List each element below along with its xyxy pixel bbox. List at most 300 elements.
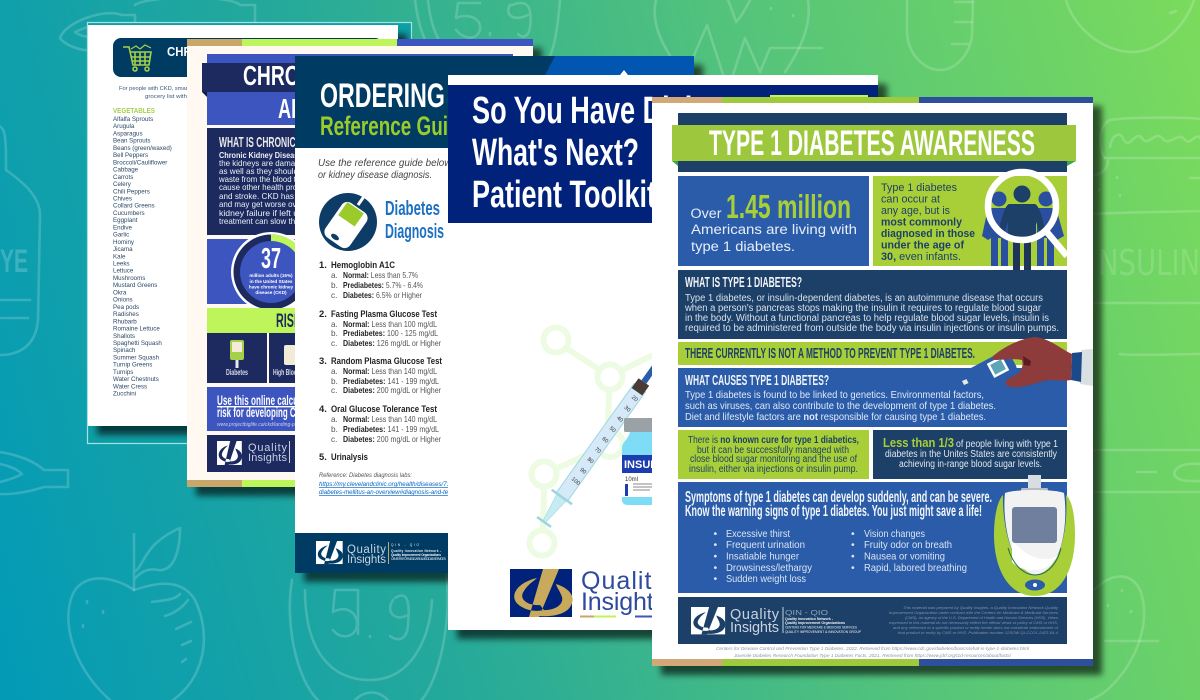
text: americans: Americans are living with xyxy=(691,222,857,237)
sleeve xyxy=(1080,349,1093,386)
vegetable list: Alfalfa Sprouts xyxy=(113,116,153,123)
diagnosis test list: Fasting Plasma Glucose Test xyxy=(331,308,437,319)
vegetable list: Hominy xyxy=(113,239,135,246)
symptom list right: • xyxy=(851,562,855,574)
fine print: Quality Innovation Network - xyxy=(391,549,441,553)
symptom list left: Insatiable hunger xyxy=(726,550,799,562)
diagnosis test list: Prediabetes: 5.7% - 6.4% xyxy=(343,281,423,290)
callout: online calculator: risk for developing CKD xyxy=(217,404,307,420)
caption: in the United States xyxy=(250,279,293,284)
vegetable list: Onions xyxy=(113,297,133,304)
vegetable list: Zucchini xyxy=(113,391,136,398)
symptom list left: Frequent urination xyxy=(726,539,805,551)
symptom list left: Sudden weight loss xyxy=(726,573,806,585)
intro text: For people with CKD, smart shopping xyxy=(119,86,214,92)
diagnosis test list: b. xyxy=(331,425,338,434)
text block xyxy=(881,182,975,263)
panel: no known cure: but it can be successfully managed with xyxy=(697,445,849,456)
text block: can occur at xyxy=(881,194,940,206)
citations: Centers for Disease Control and Prevention Type 1 Diabetes, 2022. Retrieved from https://www.cdc.gov/diabetes/basics/what-is-type-1-diabetes.html xyxy=(716,646,1030,652)
vegetable list: Lettuce xyxy=(113,268,134,275)
paragraph: and stroke. CKD has different stages of severity xyxy=(219,192,392,201)
diagnosis test list: Hemoglobin A1C xyxy=(331,259,395,270)
paragraph: kidney failure if left untreated. Early detection and xyxy=(219,209,409,218)
icon: centre person xyxy=(998,186,1046,272)
callout: online calculator xyxy=(207,387,513,431)
vegetable list: Turnips xyxy=(113,369,133,376)
title line 2: ARE YOU AT RISK? xyxy=(278,93,448,124)
QIN text: QIN - QIO xyxy=(785,610,829,617)
paragraph: when a person's pancreas stops making the insulin it requires to regulate blood sugar xyxy=(684,303,1042,314)
title line 1: So You Have Diabetes, xyxy=(472,90,763,132)
paragraph: and may get worse over time and can lead to xyxy=(219,200,377,209)
text: americans xyxy=(691,222,857,254)
diagnosis test list: a. xyxy=(331,320,338,329)
cuff xyxy=(1071,352,1082,382)
vegetable list: Bell Peppers xyxy=(113,152,148,159)
top colour band xyxy=(187,39,533,46)
diagnosis test list: Normal: Less than 5.7% xyxy=(343,271,418,280)
vegetable list: Radishes xyxy=(113,311,139,318)
vegetable list: Chives xyxy=(113,196,132,202)
disclaimer: This material was prepared by Quality Insights, a Quality Innovation Network-Quality xyxy=(903,606,1058,610)
heading: risk factors xyxy=(207,308,513,333)
title banner xyxy=(672,113,1076,172)
vegetable list: Cabbage xyxy=(113,167,139,174)
header band xyxy=(448,85,878,223)
text block: most commonly xyxy=(881,216,963,228)
disclaimer xyxy=(889,606,1059,635)
diagnosis test list: b. xyxy=(331,281,338,290)
heading xyxy=(685,489,992,520)
heading: vegetables: VEGETABLES xyxy=(113,106,155,115)
vegetable list: Eggplant xyxy=(113,217,138,224)
vegetable list: Mushrooms xyxy=(113,275,145,282)
logo divider xyxy=(289,441,290,463)
vegetable list: Turnip Greens xyxy=(113,362,152,369)
vegetable list: Garlic xyxy=(113,232,129,239)
icon: magnifier handle xyxy=(1046,231,1067,256)
reference links xyxy=(319,472,460,496)
header title: CHRONIC KIDNEY xyxy=(167,44,267,59)
paragraph xyxy=(218,151,417,226)
vegetable list: Asparagus xyxy=(113,130,143,137)
QIN text: CENTERS FOR MEDICARE & MEDICAID SERVICES xyxy=(785,626,858,630)
paragraph: as well as they should. This can cause excess fluid and xyxy=(219,167,417,176)
paragraph: Diet and lifestyle factors are not responsible for causing type 1 diabetes. xyxy=(685,411,986,423)
syringe scale: 20 xyxy=(630,395,639,403)
vegetable list: Shallots xyxy=(113,333,135,340)
syringe scale xyxy=(569,393,640,487)
diagnosis test list xyxy=(319,259,442,462)
fine print: Quality Improvement Organizations xyxy=(391,553,441,557)
document frame xyxy=(88,22,412,444)
subtitle: Reference Guide xyxy=(320,111,470,141)
diagnosis test list: c. xyxy=(331,435,337,444)
syringe scale: 70 xyxy=(593,446,602,455)
paragraph xyxy=(685,389,996,423)
illustration: hand holding glucose meter xyxy=(962,337,1093,395)
text block: of people living with type 1 xyxy=(956,439,1058,450)
vegetable list: Cucumbers xyxy=(113,210,145,217)
panel: no known cure: There is no known cure for type 1 diabetics, xyxy=(688,435,859,446)
document collage xyxy=(88,22,1093,666)
logo wordmark: Insights xyxy=(730,620,779,636)
diagnosis test list: Diabetes: 126 mg/dL or Higher xyxy=(343,339,441,348)
paragraph: Type 1 diabetes, or insulin-dependent diabetes, is an autoimmune disease that occurs xyxy=(685,293,1043,304)
diagnosis test list: Prediabetes: 141 - 199 mg/dL xyxy=(343,425,439,434)
heading: diabetes diagnosis xyxy=(385,198,444,243)
vegetable list: Collard Greens xyxy=(113,203,155,210)
vegetable list: Pea pods xyxy=(113,304,139,311)
logo divider xyxy=(388,542,389,564)
illustration: glucose meter xyxy=(994,475,1075,596)
intro text xyxy=(318,157,595,181)
QIN text: Quality Innovation Network - xyxy=(785,617,833,621)
document page xyxy=(187,39,533,487)
symptom list right: Nausea or vomiting xyxy=(864,550,945,562)
number: 1.45 million: 1.45 million xyxy=(726,188,851,225)
reference links: https://my.clevelandclinic.org/health/diseases/7104- xyxy=(319,481,460,488)
vegetable list: Mustard Greens xyxy=(113,282,157,289)
molecule diagram xyxy=(530,328,655,556)
vegetable list: Celery xyxy=(113,181,132,188)
diagnosis test list: Diabetes: 6.5% or Higher xyxy=(343,291,422,300)
meter screen xyxy=(1012,507,1057,543)
logo wordmark xyxy=(248,442,288,464)
syringe scale: 100 xyxy=(570,476,581,487)
icon: people under magnifier xyxy=(982,172,1067,272)
icon: diabetes meter circle xyxy=(319,193,377,251)
icon: glucose meter top centre xyxy=(415,0,560,58)
text: over: Over xyxy=(690,206,722,221)
diagnosis test list: Prediabetes: 141 - 199 mg/dL xyxy=(343,377,439,386)
diagnosis test list: b. xyxy=(331,377,338,386)
heading: WHAT IS CHRONIC KIDNEY DISEASE? xyxy=(219,134,374,151)
paragraph: cause other health problems, such as heart disease xyxy=(219,183,399,192)
vegetable list: Kale xyxy=(113,253,126,260)
vegetable list: Carrots xyxy=(113,174,133,181)
panel: what is type 1 diabetes xyxy=(678,270,1067,339)
symptom list right: Rapid, labored breathing xyxy=(864,562,967,574)
symptom list right: Vision changes xyxy=(864,528,925,540)
icon: right person xyxy=(1037,192,1064,266)
vegetable list: Romaine Lettuce xyxy=(113,326,160,332)
icon: logo xyxy=(316,541,343,564)
diagnosis test list: Diabetes: 200 mg/dL or Higher xyxy=(343,435,441,444)
icon: glucose meter xyxy=(230,340,244,368)
disclaimer: that product or entity by CMS or HHS. Publication number 12SOW-QI-CCO1-2423-04-4 xyxy=(898,631,1058,635)
reference links: Reference: Diabetes diagnosis labs: xyxy=(319,472,412,479)
number: 37 xyxy=(261,243,281,275)
citations: Juvenile Diabetes Research Foundation Type 1 Diabetes Facts, 2021. Retrieved from https://www.jdrf.org/t1d-resources/about/facts/ xyxy=(733,653,1012,659)
diagnosis test list: c. xyxy=(331,291,337,300)
panel: no known cure xyxy=(678,430,869,479)
symptom list right: • xyxy=(851,539,855,551)
panel: grocery list document xyxy=(88,22,412,444)
icon: glucose meter lower centre xyxy=(290,570,448,700)
vegetable list: Rhubarb xyxy=(113,318,137,325)
callout: no prevention method xyxy=(678,342,1067,365)
document page xyxy=(448,75,878,630)
icon: left person xyxy=(982,192,1008,266)
symptom list right: • xyxy=(851,528,855,540)
icon: insulin vial right xyxy=(1092,118,1200,492)
logo wordmark: Insights xyxy=(248,452,288,464)
logo wordmark: Quality xyxy=(248,442,288,454)
footer with logo xyxy=(678,597,1067,644)
panel: what is chronic kidney disease xyxy=(207,128,513,235)
icon: left bottle with label xyxy=(0,125,40,355)
callout: no prevention method: THERE CURRENTLY IS NOT A METHOD TO PREVENT TYPE 1 DIABETES. xyxy=(685,345,975,362)
symptom list left: Excessive thirst xyxy=(726,528,790,540)
text block: any age, but is xyxy=(881,205,950,217)
icon: lower-right apple xyxy=(1085,576,1158,700)
tile: high blood pressure xyxy=(269,333,329,383)
fine print: CENTERS FOR MEDICARE & MEDICAID SERVICES xyxy=(391,557,446,561)
paragraph: such as viruses, can also contribute to the development of type 1 diabetes. xyxy=(685,400,996,412)
diagnosis test list: a. xyxy=(331,271,338,280)
vegetable list: Spinach xyxy=(113,347,136,354)
intro text xyxy=(119,86,214,100)
logo wordmark: Insights xyxy=(347,554,386,566)
symptom list right: Fruity odor on breath xyxy=(864,539,952,551)
text: americans: type 1 diabetes. xyxy=(691,239,795,254)
symptom list left: • xyxy=(714,573,718,585)
vegetable list: Water Cress xyxy=(113,383,147,390)
caption: have chronic kidney xyxy=(249,284,294,290)
symptom list right: • xyxy=(851,550,855,562)
fine print: QIN - QIO xyxy=(391,543,420,547)
symptom list left: • xyxy=(714,528,718,540)
label: High Blood Pressure xyxy=(273,367,323,377)
panel: less than one third xyxy=(873,430,1067,479)
diagnosis test list: 5. xyxy=(319,451,327,462)
QIN text: QUALITY IMPROVEMENT & INNOVATION GROUP xyxy=(785,630,862,634)
text block: achieving in-range blood sugar levels. xyxy=(899,459,1042,470)
callout: online calculator: www.projectbiglife.ca/ckd/landing-page xyxy=(217,422,303,428)
heading: WHAT IS TYPE 1 DIABETES? xyxy=(685,275,802,291)
text block: diabetes in the Unites States are consistently xyxy=(885,449,1057,460)
heading: WHAT CAUSES TYPE 1 DIABETES? xyxy=(685,372,829,389)
vegetable list: Endive xyxy=(113,224,132,231)
text block: 30, even infants. xyxy=(881,251,961,263)
diagnosis test list: 2. xyxy=(319,308,327,319)
symptom list left: • xyxy=(714,539,718,551)
diagnosis test list: a. xyxy=(331,367,338,376)
symptom list left: Drowsiness/lethargy xyxy=(726,562,813,574)
citations xyxy=(716,646,1030,659)
icon: top-left utensil xyxy=(60,0,255,51)
heading: diabetes diagnosis: Diabetes xyxy=(385,198,440,220)
disclaimer: and any reference to a specific product or entity herein does not constitute endorsement of xyxy=(893,626,1059,630)
panel: ordering tests reference guide document xyxy=(295,56,694,573)
highlight: Less than 1/3 xyxy=(883,436,954,450)
vial label: INSULIN xyxy=(624,459,668,471)
tile: diabetes xyxy=(207,333,267,383)
heading: Know the warning signs of type 1 diabetes. You just might save a life! xyxy=(685,503,982,520)
top colour band xyxy=(652,97,1093,103)
vegetable list: Jicama xyxy=(113,246,133,253)
panel: patient toolkit document xyxy=(448,75,878,630)
paragraph: in the body. Without a functional pancreas to help regulate blood sugar levels, insulin is xyxy=(685,313,1049,324)
vegetable list: Summer Squash xyxy=(113,354,160,361)
logo wordmark: Quality xyxy=(730,607,780,623)
symptom list right xyxy=(851,528,967,574)
syringe scale: 50 xyxy=(608,426,617,434)
meter body xyxy=(963,349,1019,395)
icon: shopping cart xyxy=(123,45,151,71)
meter strip xyxy=(962,375,978,385)
title block xyxy=(202,54,518,125)
heading: diabetes diagnosis: Diagnosis xyxy=(385,221,444,243)
bottom colour band xyxy=(187,480,533,487)
icon: logo xyxy=(691,607,725,634)
disclaimer: Improvement Organization under contract with the Centers for Medicare & Medicaid Services xyxy=(889,611,1058,615)
hand xyxy=(992,337,1072,387)
paragraph: the kidneys are damaged and cannot filter blood xyxy=(219,159,389,168)
diagnosis test list: 4. xyxy=(319,403,327,414)
QIN text xyxy=(785,610,862,634)
diagnosis test list: Normal: Less than 140 mg/dL xyxy=(343,367,437,376)
vegetable list: Bean Sprouts xyxy=(113,138,150,145)
panel: no known cure: insulin, either via injections or insulin pump. xyxy=(689,464,858,475)
logo wordmark: Insights xyxy=(581,588,666,616)
panel: symptoms xyxy=(678,475,1075,596)
panel: no known cure: close blood sugar monitoring and the use of xyxy=(690,454,857,465)
caption xyxy=(249,273,294,295)
vegetable list: Okra xyxy=(113,289,127,296)
document page xyxy=(88,25,398,426)
intro text: grocery list with xyxy=(145,94,187,100)
logo divider xyxy=(782,607,784,633)
insulin vial xyxy=(622,418,668,505)
callout: online calculator: Use this online calculator to determine your xyxy=(217,392,387,408)
paragraph: required to be administered from outside the body via insulin injections or insulin pumps. xyxy=(685,323,1059,334)
syringe scale: 40 xyxy=(615,415,624,424)
vegetable list: Leeks xyxy=(113,260,130,268)
QIN text: Quality Improvement Organizations xyxy=(785,621,845,625)
panel: age of diagnosis xyxy=(873,172,1067,272)
icon: quality insights logo xyxy=(510,569,573,617)
header band xyxy=(113,38,383,77)
caption: million adults (15%) xyxy=(249,273,293,278)
icon: left bottle with label: YE xyxy=(0,243,28,279)
icon: pressure cuff xyxy=(284,345,296,365)
diagnosis test list: Urinalysis xyxy=(331,451,368,462)
icon: top apple with heartbeat xyxy=(652,0,822,90)
text block xyxy=(885,439,1058,470)
syringe scale: 80 xyxy=(586,457,594,465)
logo wordmark xyxy=(347,544,386,566)
vegetable list: Broccoli/Cauliflower xyxy=(113,159,167,166)
vegetable list: Spaghetti Squash xyxy=(113,340,162,347)
meter button xyxy=(1025,580,1045,590)
disclaimer: (CMS), an agency of the U.S. Department of Health and Human Services (HHS). Views xyxy=(905,616,1058,620)
intro text: or kidney disease diagnosis. xyxy=(318,169,432,181)
logo wordmark: Quality xyxy=(581,567,666,595)
symptom list left: • xyxy=(714,550,718,562)
diagnosis test list: Normal: Less than 100 mg/dL xyxy=(343,320,437,329)
diagnosis test list: 3. xyxy=(319,355,327,366)
panel: what causes type 1 diabetes xyxy=(678,368,1067,427)
icon: carrot xyxy=(907,0,973,70)
logo wordmark xyxy=(730,607,780,636)
vegetable list xyxy=(113,116,172,398)
caption: disease (CKD) xyxy=(255,290,287,295)
syringe scale: 90 xyxy=(578,467,587,476)
vial dose: 10ml xyxy=(625,477,638,483)
text block: Type 1 diabetes xyxy=(881,182,957,194)
paragraph: waste from the blood to remain in the body and may xyxy=(218,175,400,184)
icon: top-right apple xyxy=(1066,0,1194,52)
paragraph xyxy=(684,293,1059,334)
title line 1: CHRONIC KIDNEY DISEASE xyxy=(243,60,501,91)
paragraph: Type 1 diabetes is found to be linked to genetics. Environmental factors, xyxy=(685,389,984,401)
panel: type 1 diabetes awareness document xyxy=(652,97,1093,666)
symptom list left xyxy=(714,528,813,585)
lime accent strip xyxy=(770,95,868,98)
vegetable list: Chili Peppers xyxy=(113,188,150,195)
diagnosis test list: c. xyxy=(331,386,337,395)
title: ORDERING TESTS xyxy=(320,77,526,115)
diagnosis test list: Random Plasma Glucose Test xyxy=(331,355,442,366)
diagnosis test list: Prediabetes: 100 - 125 mg/dL xyxy=(343,329,438,338)
fine print xyxy=(391,543,446,561)
title line 3: Patient Toolkit xyxy=(472,174,656,216)
diagnosis test list: c. xyxy=(331,339,337,348)
icon: logo xyxy=(217,441,242,465)
label: Diabetes xyxy=(226,367,248,377)
syringe scale: 60 xyxy=(600,436,609,445)
diagnosis test list: Oral Glucose Tolerance Test xyxy=(331,403,437,414)
icon: apple xyxy=(68,528,204,700)
icon: lower-left utensil xyxy=(0,452,68,494)
diagnosis test list: 1. xyxy=(319,259,327,270)
diagnosis test list: a. xyxy=(331,415,338,424)
logo wordmark: Quality xyxy=(347,544,386,556)
panel: chronic kidney disease document xyxy=(187,39,533,487)
symptom list left: • xyxy=(714,562,718,574)
heading: risk factors: RISK FACTORS xyxy=(276,311,356,332)
vegetable list: Arugula xyxy=(113,123,135,130)
intro text: Use the reference guide below when ordering tests for diabetes xyxy=(318,157,595,169)
syringe scale: 30 xyxy=(623,405,631,414)
chart: 37 million donut xyxy=(231,232,311,312)
disclaimer: expressed in this material do not necessarily reflect the official views or policy of CMS or HHS, xyxy=(889,621,1058,625)
footer with logo xyxy=(295,533,694,573)
header band xyxy=(295,56,694,148)
document page xyxy=(652,97,1093,666)
text block: diagnosed in those xyxy=(881,228,975,240)
icon: magnifier lens xyxy=(988,172,1056,240)
vegetable list: Beans (green/waxed) xyxy=(113,145,172,152)
text block: under the age of xyxy=(881,240,964,252)
logo underline xyxy=(580,616,655,618)
bottom colour band xyxy=(652,659,1093,666)
panel: 1.45 million statistic xyxy=(678,176,869,266)
syringe xyxy=(533,360,665,530)
diagnosis test list: b. xyxy=(331,329,338,338)
footer with logo xyxy=(207,435,513,472)
logo wordmark xyxy=(581,567,666,616)
diagnosis test list: Diabetes: 200 mg/dL or Higher xyxy=(343,386,441,395)
document page xyxy=(295,56,694,573)
vegetable list: Water Chestnuts xyxy=(113,376,159,383)
title line 2: What's Next? xyxy=(472,132,639,174)
reference links: diabetes-mellitus-an-overview#diagnosis-and-tests xyxy=(319,489,457,496)
panel: statistic xyxy=(207,232,513,312)
